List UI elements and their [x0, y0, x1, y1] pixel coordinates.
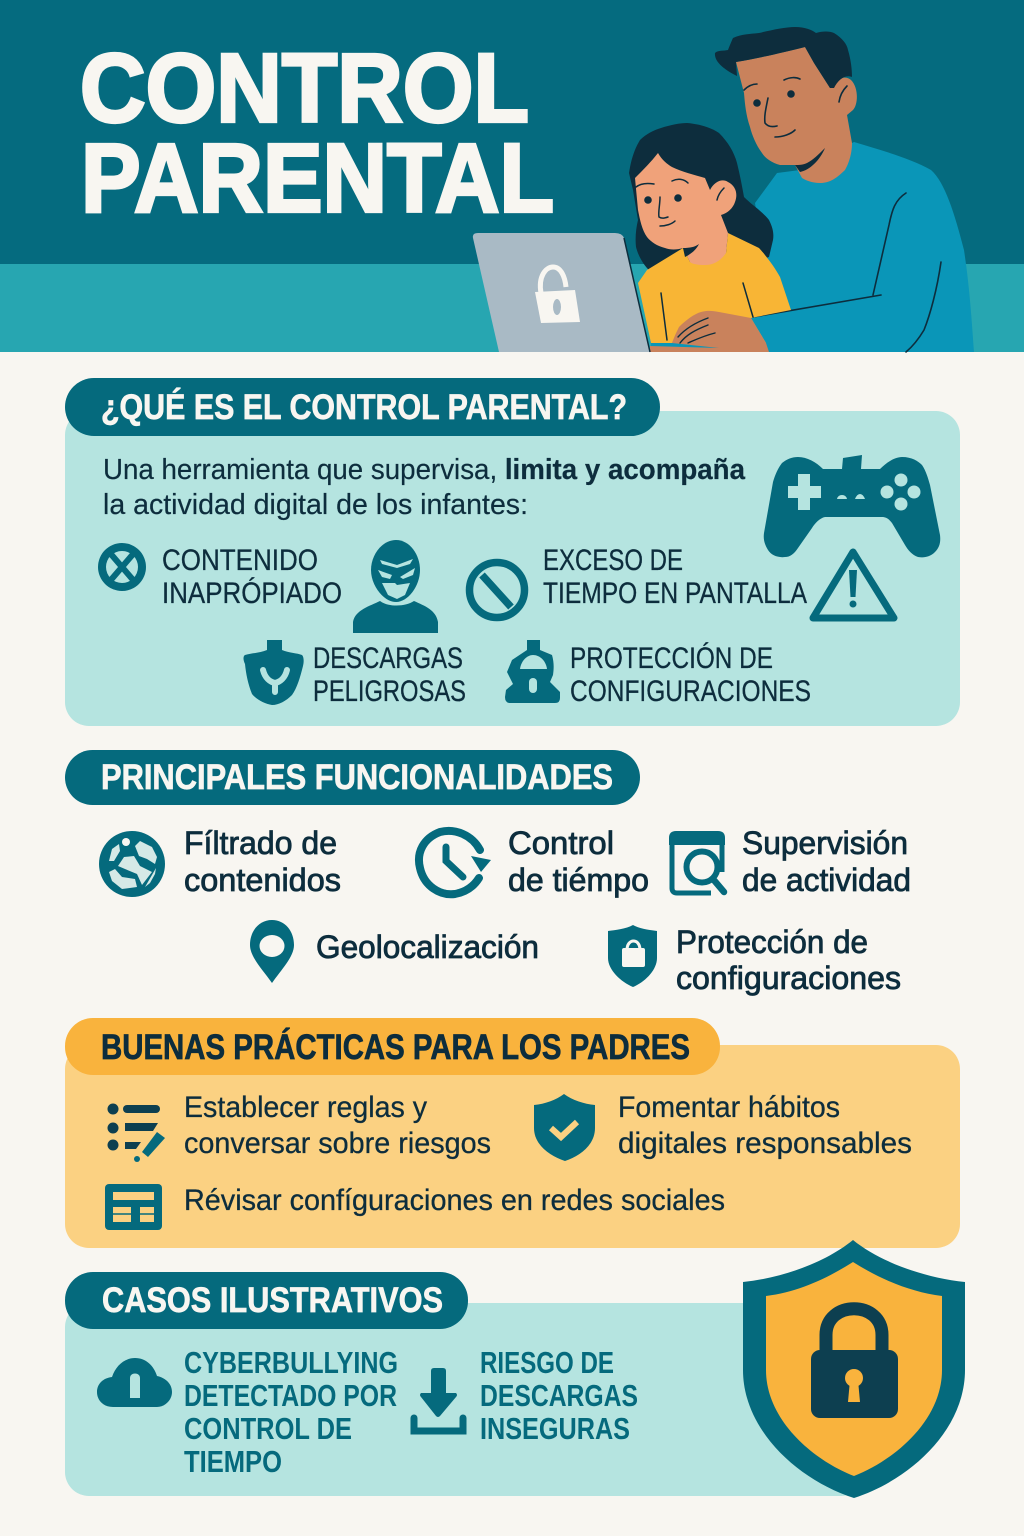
- item: fomentar habitos: [618, 1091, 912, 1160]
- text: definition: la actividad digital de los infantes:: [103, 489, 528, 521]
- item: contenido inapropiado: [162, 544, 342, 610]
- heading: principales funcionalidades: [65, 750, 640, 805]
- heading: que es el control parental: [65, 378, 660, 436]
- icon: large shield with padlock: [743, 1240, 965, 1498]
- item: establecer reglas: conversar sobre riesgos: [184, 1127, 491, 1160]
- heading: buenas practicas: BUENAS PRÁCTICAS PARA LOS PADRES: [101, 1027, 690, 1067]
- title: CONTROL: [80, 34, 529, 142]
- item: proteccion de configuraciones: PROTECCIÓN DE: [570, 642, 773, 675]
- text: definition: Una herramienta que supervisa, limita y acompaña: [103, 454, 746, 486]
- text: definition: [103, 454, 746, 521]
- item: proteccion de configuraciones: [570, 642, 811, 708]
- child figure: [629, 123, 791, 352]
- icon: globe filter: [99, 831, 165, 897]
- icon: cloud: [97, 1358, 172, 1407]
- item: exceso de tiempo: [543, 544, 807, 610]
- item: cyberbullying: [184, 1345, 398, 1479]
- item: exceso de tiempo: TIEMPO EN PANTALLA: [543, 577, 807, 610]
- icon: game controller: [764, 455, 940, 557]
- icon: crossed circle: [98, 543, 146, 591]
- item: control de tiempo: [508, 825, 649, 898]
- item: cyberbullying: TIEMPO: [184, 1444, 282, 1479]
- item: riesgo de descargas: [480, 1345, 638, 1446]
- icon: padlock: [505, 640, 560, 703]
- item: contenido inapropiado: INAPRÓPIADO: [162, 577, 342, 610]
- heading: que es el control parental: ¿QUÉ ES EL CONTROL PARENTAL?: [101, 387, 627, 427]
- heading: casos ilustrativos: [65, 1272, 468, 1329]
- icon: shield lock: [608, 925, 657, 987]
- item: filtrado de contenidos: Fíltrado de: [184, 825, 337, 861]
- icon: prohibited: [470, 562, 524, 618]
- panel: casos background: [65, 1303, 865, 1496]
- panel: header banner: [0, 0, 1024, 352]
- icon: clock: [419, 831, 491, 894]
- laptop with lock: [473, 233, 650, 352]
- item: fomentar habitos: Fomentar hábitos: [618, 1091, 840, 1124]
- item: cyberbullying: CYBERBULLYING: [184, 1345, 398, 1380]
- item: filtrado de contenidos: [184, 825, 341, 898]
- item: riesgo de descargas: DESCARGAS: [480, 1378, 638, 1413]
- icon: warning triangle: [813, 552, 894, 618]
- heading: casos ilustrativos: CASOS ILUSTRATIVOS: [102, 1281, 443, 1320]
- icon: masked person: [353, 540, 438, 633]
- panel: que es background: [65, 411, 960, 726]
- item: supervision de actividad: [742, 825, 911, 898]
- parent figure: [651, 27, 974, 352]
- item: fomentar habitos: digitales responsables: [618, 1127, 912, 1160]
- icon: shield check: [534, 1094, 595, 1161]
- item: revisar configuraciones: Révisar confíguraciones en redes sociales: [184, 1184, 725, 1217]
- item: geolocalizacion: Geolocalización: [316, 929, 539, 965]
- item: control de tiempo: Control: [508, 825, 614, 861]
- item: proteccion de configuraciones: Protección de: [676, 924, 868, 960]
- item: riesgo de descargas: INSEGURAS: [480, 1411, 630, 1446]
- icon: activity search window: [669, 831, 725, 893]
- icon: checklist with pencil: [108, 1104, 165, 1162]
- item: exceso de tiempo: EXCESO DE: [543, 544, 683, 577]
- heading: principales funcionalidades: PRINCIPALES FUNCIONALIDADES: [101, 758, 613, 797]
- item: descargas peligrosas: [313, 642, 466, 708]
- heading: buenas practicas: [65, 1018, 720, 1075]
- item: descargas peligrosas: DESCARGAS: [313, 642, 463, 675]
- item: proteccion de configuraciones: CONFIGURACIONES: [570, 675, 811, 708]
- illustration: parent and child at laptop: [473, 27, 974, 352]
- title: [80, 34, 554, 232]
- title: PARENTAL: [81, 124, 554, 232]
- icon: hazard shield: [244, 640, 304, 705]
- item: cyberbullying: DETECTADO POR: [184, 1378, 397, 1413]
- item: proteccion de configuraciones: [676, 924, 901, 996]
- item: control de tiempo: de tiémpo: [508, 862, 649, 898]
- item: riesgo de descargas: RIESGO DE: [480, 1345, 614, 1380]
- item: contenido inapropiado: CONTENIDO: [162, 544, 318, 577]
- item: filtrado de contenidos: contenidos: [184, 862, 341, 898]
- item: establecer reglas: Establecer reglas y: [184, 1091, 427, 1124]
- item: proteccion de configuraciones: configuraciones: [676, 960, 901, 996]
- panel: buenas practicas background: [65, 1045, 960, 1248]
- item: cyberbullying: CONTROL DE: [184, 1411, 352, 1446]
- icon: location pin: [250, 920, 294, 983]
- item: descargas peligrosas: PELIGROSAS: [313, 675, 466, 708]
- icon: settings table: [105, 1184, 162, 1230]
- item: supervision de actividad: de actividad: [742, 862, 911, 898]
- icon: download: [414, 1368, 463, 1431]
- item: establecer reglas: [184, 1091, 491, 1160]
- item: supervision de actividad: Supervisión: [742, 825, 908, 861]
